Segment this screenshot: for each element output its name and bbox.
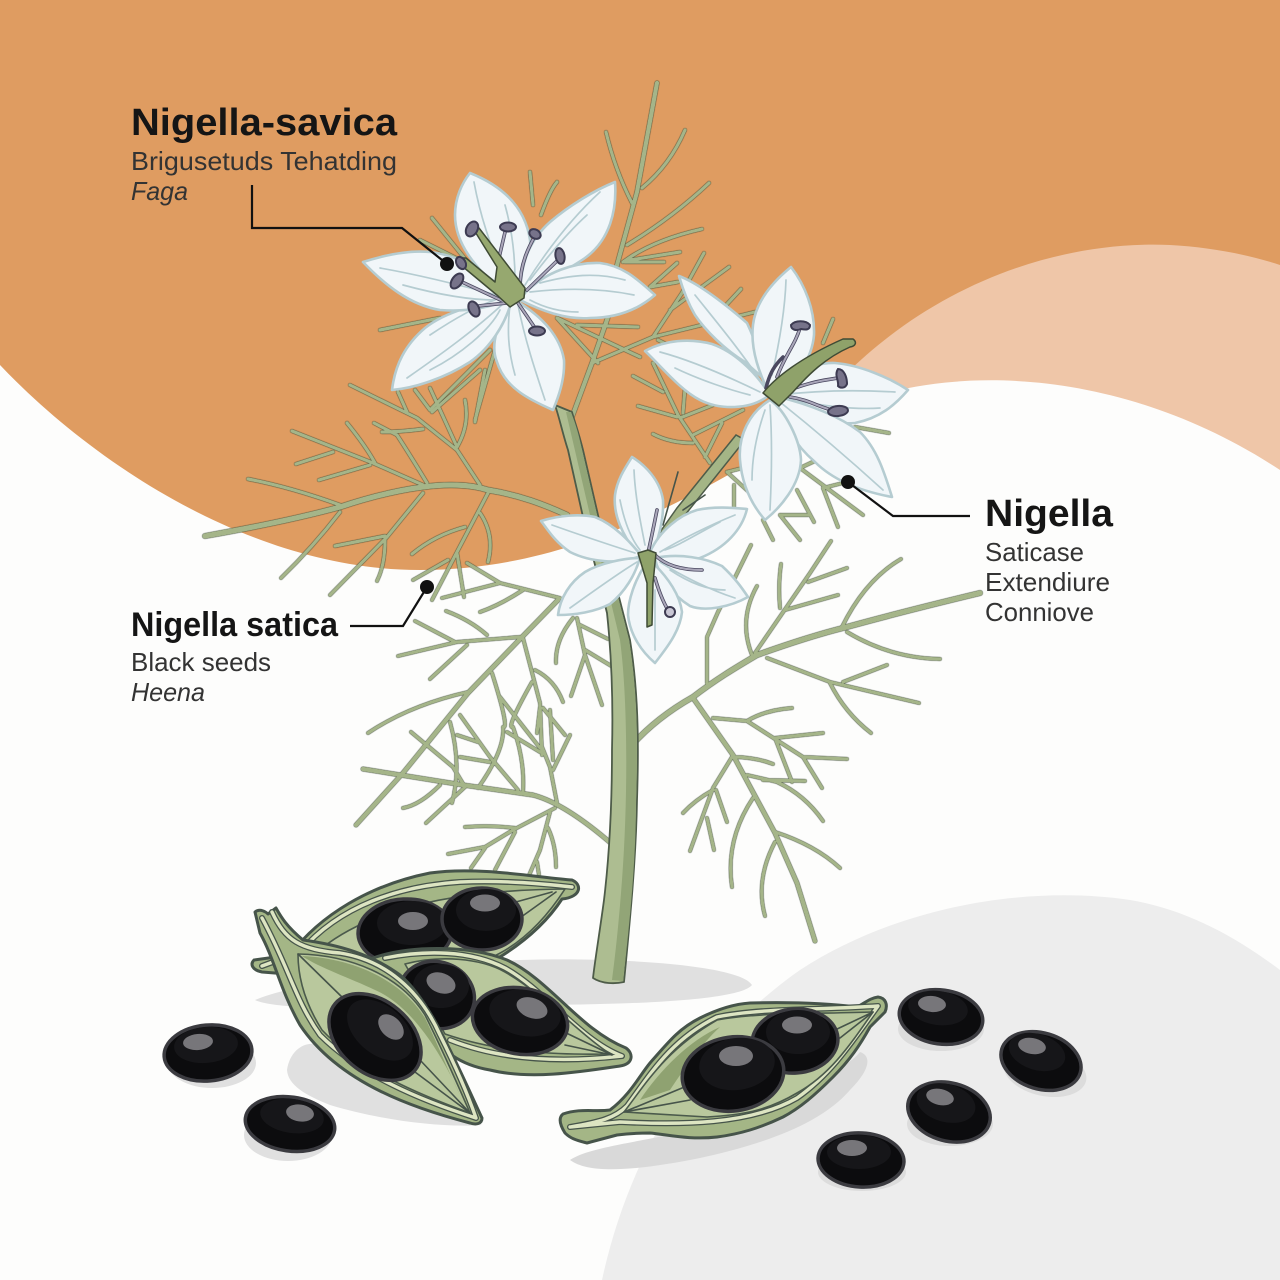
plant foliage — [205, 83, 980, 941]
seed — [677, 1030, 789, 1118]
petal: upper right — [520, 182, 615, 295]
seed — [442, 888, 522, 950]
petal: lower right — [655, 556, 748, 609]
petal: top — [752, 267, 814, 395]
label: Nigella satica — [131, 606, 339, 707]
petal: right — [768, 363, 908, 423]
seed — [467, 980, 573, 1062]
anthers — [791, 321, 848, 417]
petal: upper right — [650, 508, 747, 561]
flower: top left — [363, 173, 655, 410]
leaf: lower left frond two — [363, 769, 613, 880]
petal: bottom — [494, 300, 564, 410]
petal veins — [552, 470, 735, 650]
petal veins — [660, 280, 895, 510]
petal: back narrow — [679, 276, 763, 378]
anthers — [448, 219, 566, 336]
pistil — [460, 228, 525, 307]
petal veins — [380, 182, 634, 400]
leaf: right frond — [632, 541, 980, 745]
label: Nigella: Conniove — [985, 597, 1094, 627]
label: Nigella-savica — [131, 102, 398, 206]
petal: left — [541, 515, 640, 561]
leaf: left frond — [205, 370, 567, 600]
petal: bottom — [740, 400, 801, 520]
petal: lower right — [775, 396, 892, 497]
flower: right — [645, 267, 908, 520]
seed pod: right — [560, 997, 886, 1143]
seed — [312, 976, 438, 1098]
seed — [994, 1022, 1091, 1104]
label: Nigella-savica: Faga — [131, 176, 188, 206]
pistil — [763, 339, 855, 406]
seed — [896, 984, 986, 1051]
petal: bottom left — [392, 300, 512, 390]
label: Nigella: Extendiure — [985, 567, 1110, 597]
petal: right — [520, 263, 655, 318]
stamens — [648, 510, 702, 617]
seed pod: middle — [373, 948, 631, 1075]
seed — [162, 1021, 256, 1088]
ground shadows — [255, 959, 867, 1169]
label: Nigella-savica: Brigusetuds Tehatding — [131, 146, 397, 176]
seed — [356, 897, 454, 967]
seed — [390, 951, 484, 1039]
seed pod: left — [255, 908, 482, 1124]
label: Nigella: Saticase — [985, 537, 1084, 567]
petal: lower left — [558, 558, 640, 615]
label: Nigella — [985, 493, 1114, 627]
seed — [817, 1131, 906, 1191]
petal: bottom — [628, 565, 682, 663]
flower: centre — [541, 457, 748, 663]
seed pod: back — [252, 871, 579, 975]
leaf: behind second flower — [633, 319, 889, 540]
label: Nigella-savica: Nigella-savica — [131, 102, 398, 144]
leader: Nigella-savica to flower — [252, 185, 454, 271]
main stem — [555, 405, 638, 983]
stamens — [462, 228, 560, 328]
petal: left — [645, 341, 768, 407]
petal: top — [455, 173, 530, 295]
leader: Nigella to flower — [841, 475, 970, 516]
pistil — [638, 550, 656, 627]
loose seeds — [162, 984, 1091, 1191]
label: Nigella satica: Black seeds — [131, 647, 271, 677]
seed — [749, 1005, 841, 1077]
label: Nigella satica: Nigella satica — [131, 606, 339, 644]
label: Nigella satica: Heena — [131, 677, 205, 707]
petal: top — [615, 457, 663, 558]
label: Nigella: Nigella — [985, 493, 1114, 535]
leaf: upper spray — [380, 83, 767, 420]
petal: left — [363, 252, 512, 310]
seed — [901, 1073, 997, 1151]
leaf: lower left frond one — [356, 563, 613, 825]
leader: Nigella satica to leaf — [350, 580, 434, 626]
stamens — [766, 328, 838, 411]
seed — [242, 1091, 338, 1161]
stem: to second flower — [660, 435, 745, 535]
leaf: lower right frond — [683, 698, 847, 941]
